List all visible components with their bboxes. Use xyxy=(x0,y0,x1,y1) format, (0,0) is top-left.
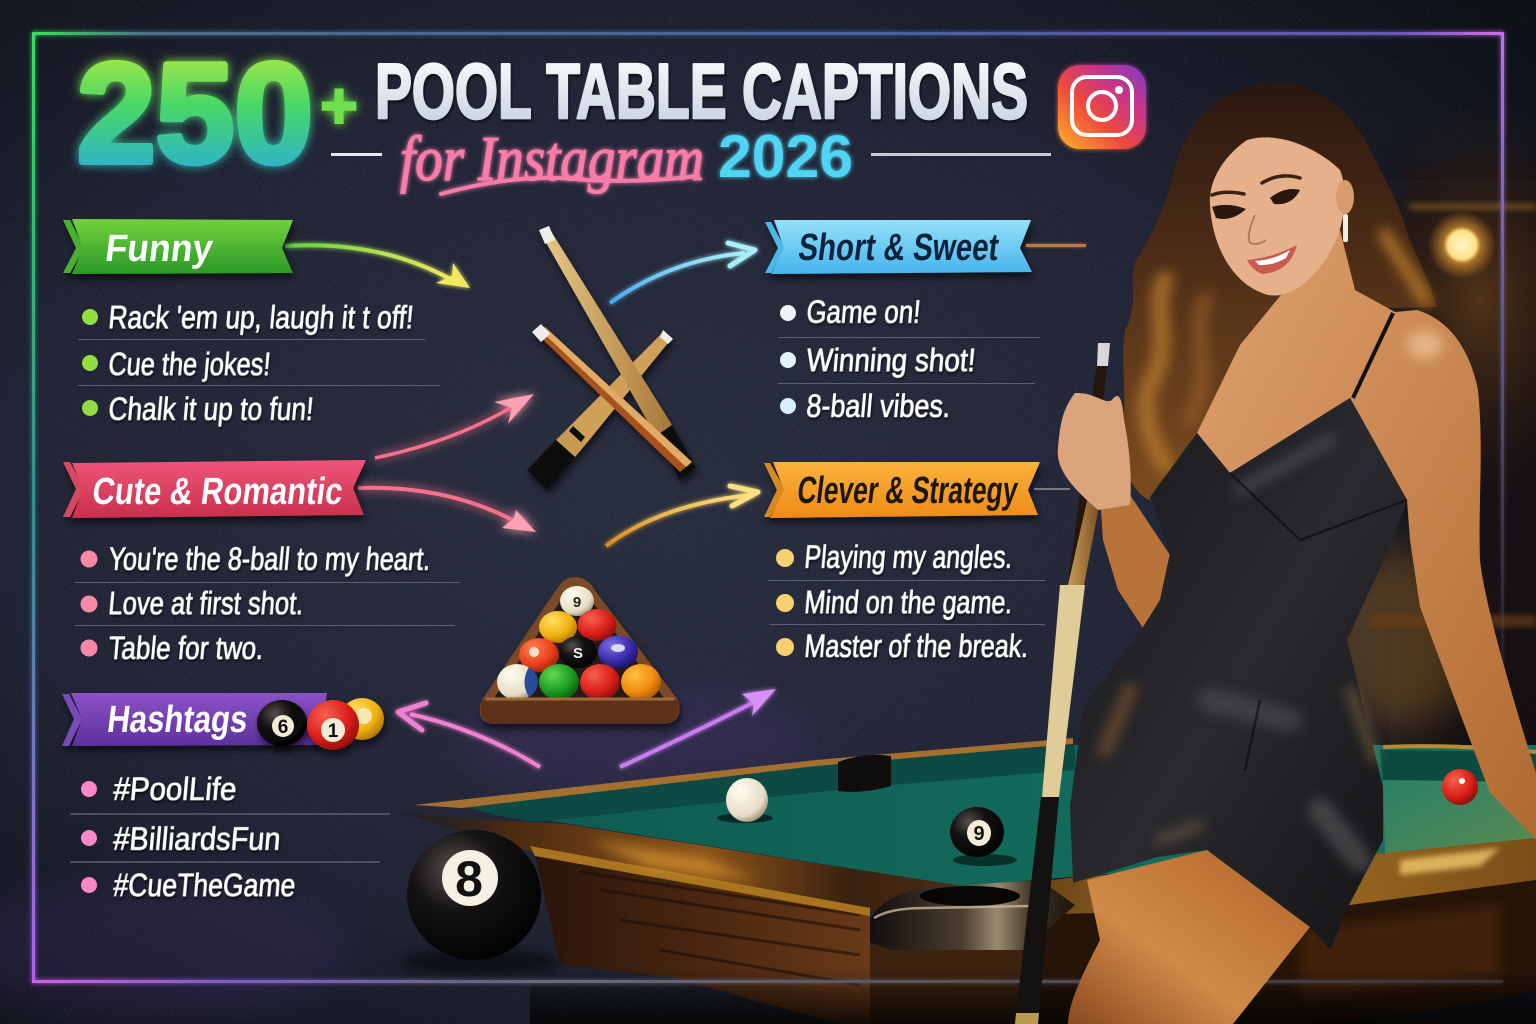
banner: short and sweet: Short & Sweet xyxy=(796,226,1001,269)
far pocket xyxy=(838,755,891,792)
eight ball xyxy=(400,830,560,974)
list: clever and strategy: Master of the break. xyxy=(803,628,1030,664)
table side xyxy=(535,855,870,1024)
banner: hashtags xyxy=(62,693,327,746)
accent line: clever and strategy xyxy=(1034,488,1070,490)
icon: ball rack xyxy=(480,577,679,724)
list: clever and strategy: Mind on the game. xyxy=(803,584,1014,620)
cue: long light wood xyxy=(539,226,696,480)
figure: player in black dress xyxy=(1068,83,1536,1024)
subtitle lines xyxy=(331,153,1051,156)
list: short and sweet: Game on! xyxy=(805,294,922,330)
arrow: cute lower xyxy=(358,488,536,532)
list: cute and romantic: Love at first shot. xyxy=(107,585,305,621)
dress xyxy=(1070,398,1407,950)
nose xyxy=(1249,215,1266,244)
icon: instagram xyxy=(1058,65,1146,149)
arrow: cute upper xyxy=(375,394,534,458)
dress sheen xyxy=(1105,440,1375,860)
icon: ball rack: S xyxy=(573,645,583,662)
list: funny: Cue the jokes! xyxy=(107,346,272,382)
list: cute and romantic: You're the 8-ball to my heart. xyxy=(107,541,432,577)
ear and earring xyxy=(1336,180,1354,242)
list: hashtags xyxy=(70,771,390,903)
title: pool table captions: POOL TABLE CAPTIONS xyxy=(375,47,1028,135)
list: hashtags: #CueTheGame xyxy=(112,867,297,903)
title: 250+: 250 xyxy=(77,34,313,193)
smile xyxy=(1247,245,1297,274)
lamp xyxy=(1428,211,1496,279)
legs xyxy=(1068,850,1310,1024)
banner: funny xyxy=(63,219,293,274)
list: short and sweet: 8-ball vibes. xyxy=(805,388,952,424)
ball: red xyxy=(1442,769,1478,805)
banner: cute and romantic: Cute & Romantic xyxy=(90,470,345,513)
list: clever and strategy xyxy=(768,539,1045,664)
cushion xyxy=(462,745,1075,822)
list: short and sweet xyxy=(778,294,1040,424)
list: clever and strategy: Playing my angles. xyxy=(803,539,1014,575)
banner: hashtags: Hashtags xyxy=(105,698,250,741)
arrow: short and sweet xyxy=(610,243,755,303)
right side wood xyxy=(1030,875,1536,1024)
arrow: hashtags xyxy=(398,703,540,767)
strap xyxy=(1353,313,1393,398)
near rail xyxy=(395,812,962,912)
banner: funny: Funny xyxy=(103,227,215,270)
dress seams xyxy=(1230,473,1407,770)
banner: cute and romantic xyxy=(63,460,366,518)
pool table xyxy=(395,738,1536,1024)
list: hashtags: #BilliardsFun xyxy=(112,821,282,857)
title xyxy=(77,34,1051,194)
cue: brown xyxy=(532,324,692,472)
accent line: short and sweet xyxy=(1026,244,1086,247)
subtitle: for Instagram: for Instagram xyxy=(400,123,704,194)
cue: back, running lower-left xyxy=(527,330,673,490)
banner: clever and strategy xyxy=(764,462,1040,518)
raised arm xyxy=(1100,495,1170,628)
hair xyxy=(1122,83,1437,500)
shoulder sheen xyxy=(1407,331,1443,359)
table felt xyxy=(496,745,1536,886)
arrow: funny xyxy=(285,245,470,288)
body skin xyxy=(1197,230,1536,840)
icon: crossed cues xyxy=(527,226,696,490)
corner pocket xyxy=(870,880,1075,950)
gripping hand xyxy=(1058,393,1131,510)
icon: ball rack: 9 xyxy=(573,594,581,611)
title: 250+: + xyxy=(320,68,358,142)
list: funny: Chalk it up to fun! xyxy=(107,391,315,427)
icon: hashtag balls xyxy=(257,698,384,750)
eyes and brows xyxy=(1212,176,1300,219)
list: hashtags: #PoolLife xyxy=(112,771,238,807)
arrow: clever xyxy=(606,486,758,546)
right felt highlight xyxy=(1383,780,1536,853)
list: short and sweet: Winning shot! xyxy=(805,342,977,378)
arrow: purple up xyxy=(620,689,776,767)
subtitle: 2026: 2026 xyxy=(718,123,853,190)
rail highlight xyxy=(590,840,760,880)
pool cue xyxy=(1015,343,1110,1024)
side fade xyxy=(530,900,1536,1024)
hair highlights xyxy=(1146,235,1425,465)
ball: cue ball xyxy=(717,778,773,823)
ball: nine: 9 xyxy=(973,823,985,845)
list: funny: Rack 'em up, laugh it t off! xyxy=(107,299,415,335)
icon: hashtag balls: 6 xyxy=(278,717,288,738)
icon: hashtag balls: 1 xyxy=(328,721,339,742)
list: funny xyxy=(78,299,440,427)
list: cute and romantic xyxy=(75,541,460,666)
list: cute and romantic: Table for two. xyxy=(107,630,265,666)
top rail xyxy=(414,738,1073,808)
right rail xyxy=(1000,838,1536,915)
banner: short and sweet xyxy=(765,220,1032,274)
banner: clever and strategy: Clever & Strategy xyxy=(795,469,1020,512)
ball: nine xyxy=(950,807,1017,866)
eight ball: 8 xyxy=(455,851,483,907)
face xyxy=(1210,137,1345,296)
